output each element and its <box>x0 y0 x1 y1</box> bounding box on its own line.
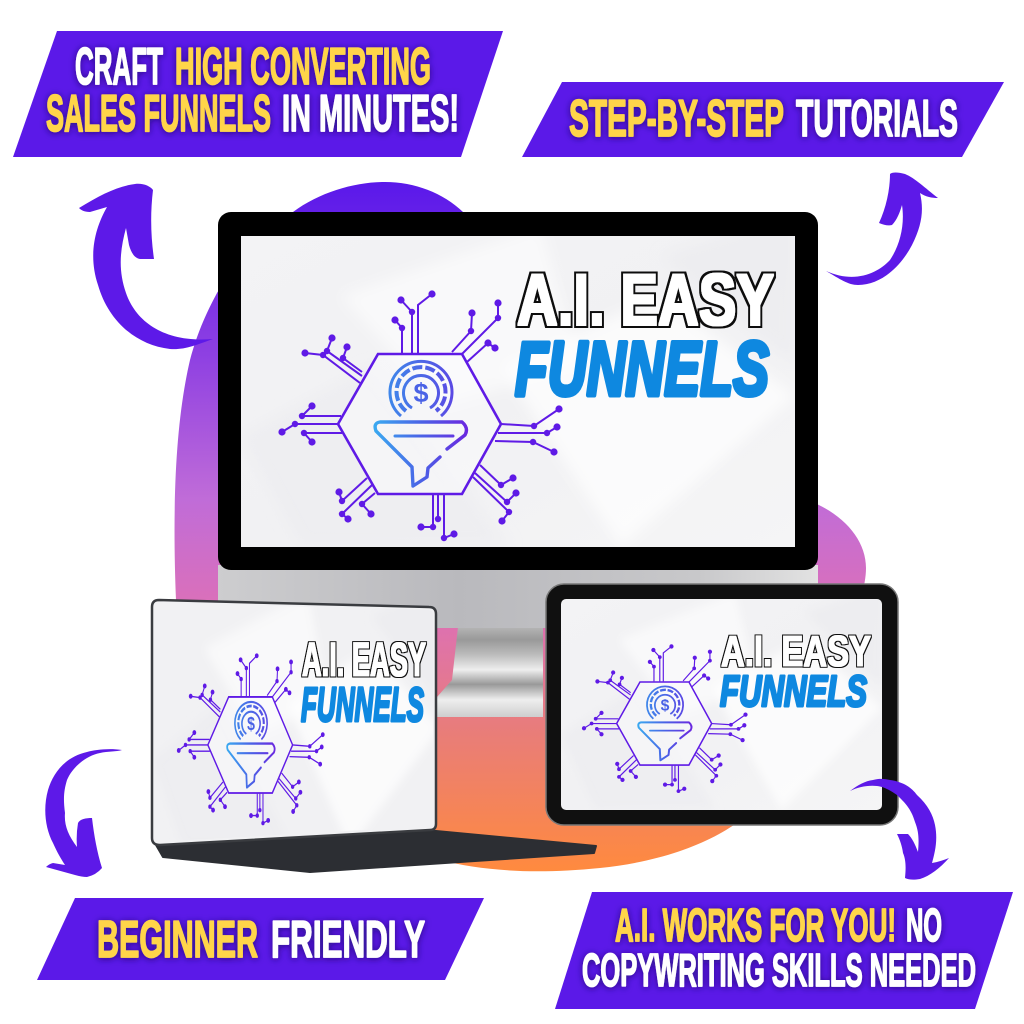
banner: ai works for you <box>555 892 1013 1009</box>
banner: step-by-step tutorials <box>522 82 1004 157</box>
monitor logo title <box>515 260 774 412</box>
laptop screen <box>152 584 440 849</box>
tablet logo title <box>720 627 871 716</box>
laptop logo emblem <box>177 653 325 825</box>
laptop base <box>152 831 596 872</box>
monitor logo title: A.I. EASY <box>517 260 774 341</box>
tablet body <box>546 584 898 825</box>
monitor chin <box>218 565 818 628</box>
laptop logo title: FUNNELS <box>301 679 424 732</box>
banner: step-by-step tutorials: STEP-BY-STEP <box>569 90 784 148</box>
banner: beginner friendly <box>37 898 484 980</box>
monitor logo emblem: $ <box>413 378 429 408</box>
banner: craft high converting sales funnels: HIGH CONVERTING <box>175 38 431 96</box>
monitor logo emblem <box>278 290 563 541</box>
laptop logo emblem: $ <box>247 714 255 734</box>
banner: beginner friendly: BEGINNER <box>97 911 258 969</box>
tablet logo title: FUNNELS <box>720 667 867 716</box>
arrow: top left <box>79 184 213 349</box>
tablet logo emblem: $ <box>661 697 670 715</box>
monitor body <box>218 212 818 570</box>
tablet screen <box>561 585 882 810</box>
banner: ai works for you: NO <box>906 899 942 951</box>
banner: craft high converting sales funnels: SALES FUNNELS <box>46 85 271 143</box>
banner: beginner friendly: FRIENDLY <box>271 911 425 969</box>
arrow: top right <box>826 172 938 285</box>
monitor stand <box>437 627 543 717</box>
banner: craft high converting sales funnels: IN MINUTES! <box>282 85 459 143</box>
tablet logo title: A.I. EASY <box>721 627 871 676</box>
background gradient blob <box>175 182 866 871</box>
laptop logo title: A.I. EASY <box>302 634 426 687</box>
banner: craft high converting sales funnels <box>13 31 503 157</box>
banner: craft high converting sales funnels: CRAFT <box>75 38 163 96</box>
monitor logo title: FUNNELS <box>515 327 769 412</box>
tablet logo emblem <box>582 644 748 793</box>
arrow: bottom right <box>850 779 949 880</box>
monitor screen <box>241 216 795 547</box>
laptop logo title <box>301 634 426 732</box>
arrow: bottom left <box>45 749 122 877</box>
